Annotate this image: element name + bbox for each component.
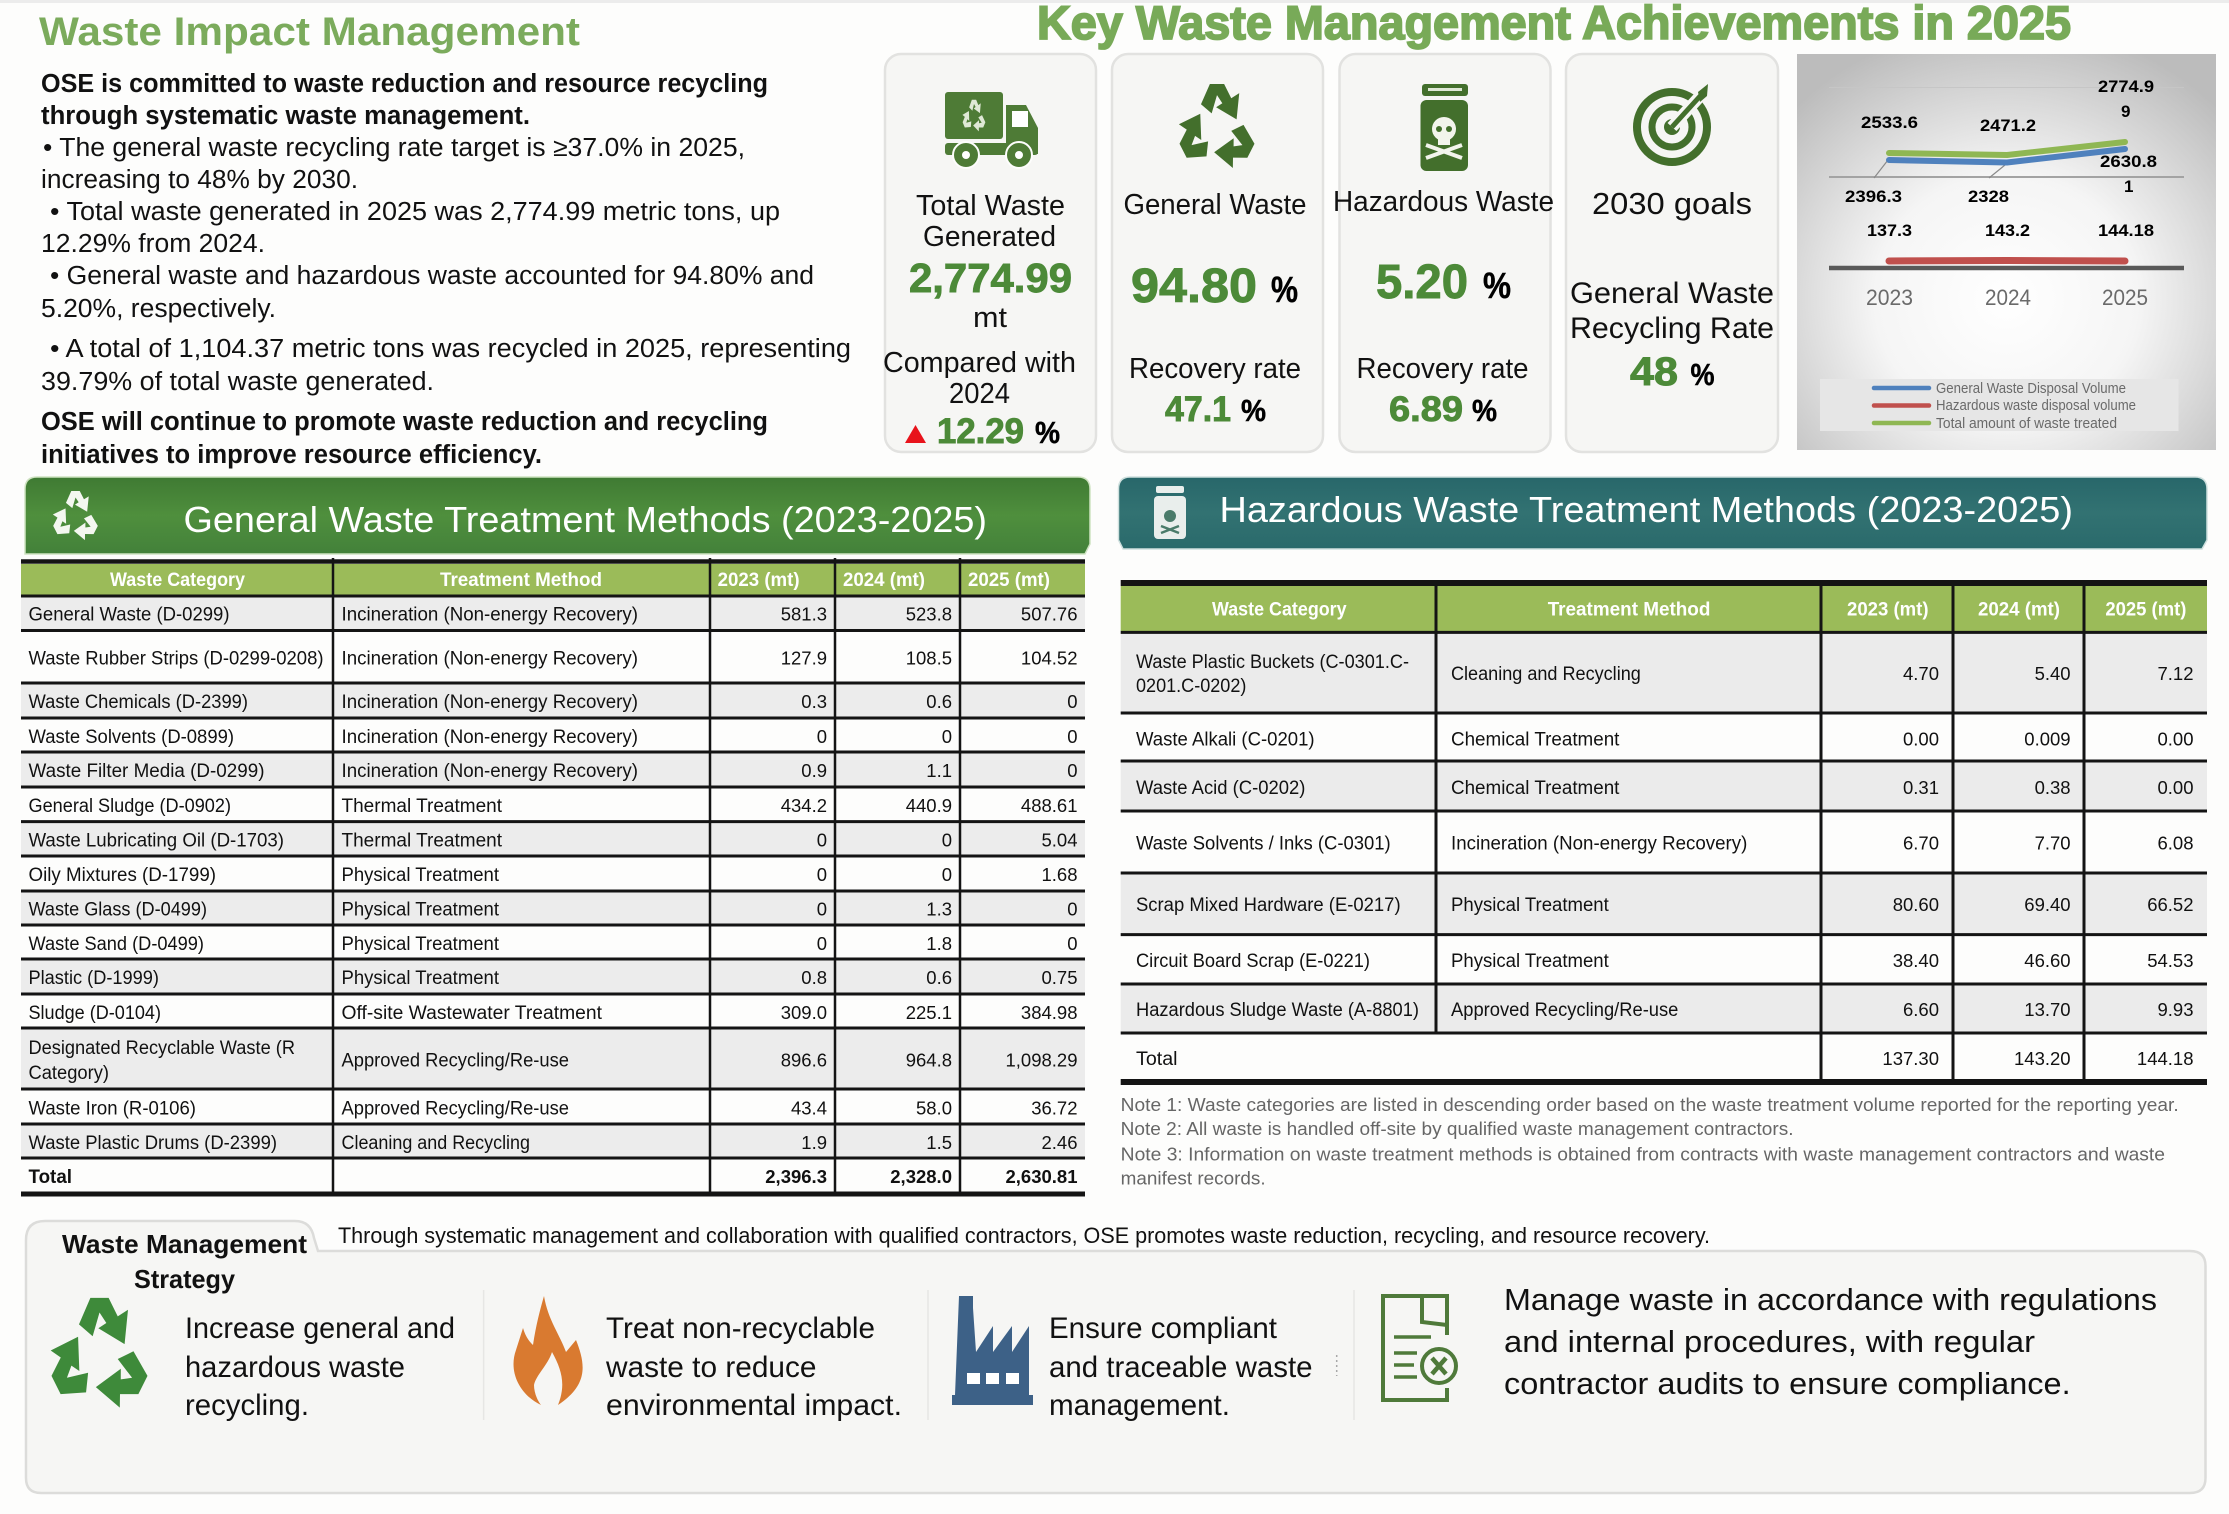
text block: waste commitment summary: through systematic waste management. [41,102,530,130]
row: Designated Recyclable Waste: 964.8 [906,1050,952,1070]
banner: general waste treatment methods [25,477,1090,554]
row: Waste Lubricating Oil: Thermal Treatment [342,830,503,852]
row: Designated Recyclable Waste: Approved Recycling/Re-use [342,1050,569,1072]
row: Waste Sand: Physical Treatment [342,934,500,955]
value: 6.89 percent [1389,390,1497,429]
row: General Waste: 507.76 [1021,604,1078,624]
icon: red up triangle [905,425,926,443]
row: Total: Total [28,1167,72,1188]
row: Hazardous Sludge Waste: Approved Recycling/Re-use [1451,1000,1678,1021]
value: 47.1 percent: 47.1 [1165,390,1231,429]
text block: table notes: manifest records. [1121,1168,1266,1188]
value: 5.20 percent: % [1483,265,1511,306]
icon: document with x mark [1383,1296,1456,1400]
data labels: 143.2 [1985,221,2030,240]
icon: white hazard bottle [1154,486,1186,539]
row: Waste Plastic Drums: 1.5 [926,1132,952,1153]
text block: waste commitment summary: initiatives to improve resource efficiency. [41,441,542,469]
table header: Waste Category [1212,600,1347,620]
row: Waste Sand: Waste Sand (D-0499) [28,934,204,955]
row: Waste Solvents / Inks [1136,832,2194,854]
value: 94.80 percent: % [1271,269,1298,310]
label: compared with 2024: 2024 [949,378,1010,410]
text block: waste commitment summary: increasing to 48% by 2030. [41,166,358,194]
data labels: 2328 [1968,187,2009,206]
row: General Waste [28,604,1078,626]
row: General Waste: 581.3 [781,604,827,624]
data labels: 137.3 [1867,221,1912,240]
text block: table notes: Note 3: Information on waste treatment methods is obtained from contracts with waste management contractors and waste [1121,1144,2165,1164]
row: Scrap Mixed Hardware: Physical Treatment [1451,895,1609,916]
row: Waste Rubber Strips: 108.5 [906,648,952,668]
row: Hazardous Sludge Waste: 9.93 [2157,999,2194,1020]
banner title: General Waste Treatment Methods (2023-2025) [184,499,987,540]
row: Oily Mixtures: 0 [942,864,952,885]
label: recovery rate: Recovery rate [1129,353,1301,385]
row: Waste Glass [28,898,1078,920]
heading: waste management strategy [62,1229,307,1294]
row: Oily Mixtures: Oily Mixtures (D-1799) [28,865,216,886]
label: hazardous waste: Hazardous Waste [1333,186,1554,218]
row: Total: Total [1136,1049,1178,1070]
row: Waste Iron: 43.4 [791,1098,827,1118]
row: General Sludge: 488.61 [1021,795,1078,816]
text: treat non-recyclable waste: waste to reduce [605,1351,816,1384]
row: Waste Alkali: Chemical Treatment [1451,730,1620,750]
row: Waste Plastic Buckets: 5.40 [2035,663,2071,684]
row: General Waste: 523.8 [906,604,952,624]
data labels: 2396.3 [1845,187,1902,206]
row: Waste Acid: 0.38 [2035,777,2071,798]
value: 47.1 percent [1165,390,1266,429]
row: Waste Plastic Drums: Cleaning and Recycling [342,1133,530,1154]
heading: waste management strategy: Waste Management [62,1229,307,1259]
label: total waste generated: Generated [923,221,1056,253]
panel: general waste card [1112,54,1323,452]
label: compared with 2024: Compared with [883,347,1076,379]
table header: 2023 (mt) [718,570,800,591]
text: regulations and audits: and internal procedures, with regular [1504,1324,2035,1359]
text: compliant and traceable [1049,1312,1312,1422]
row: General Sludge: General Sludge (D-0902) [28,796,231,817]
label: recovery rate: Recovery rate [1356,353,1528,385]
table header: 2025 (mt) [2105,600,2186,620]
row: Waste Filter Media: 0.9 [801,760,827,781]
row: Sludge: 309.0 [781,1002,827,1023]
row: Waste Plastic Buckets: 7.12 [2157,663,2194,684]
row: Waste Chemicals: Incineration (Non-energy Recovery) [342,692,638,713]
value: 6.89 percent: 6.89 [1389,390,1463,429]
text: regulations and audits: Manage waste in accordance with regulations [1504,1282,2157,1317]
row: Waste Sand: 0 [1067,933,1078,954]
text: increase recycling [185,1312,455,1422]
row: Waste Solvents: Incineration (Non-energy Recovery) [342,727,638,748]
value: 48 percent [1630,350,1714,394]
row: Waste Plastic Buckets: 0201.C-0202) [1136,676,1246,697]
icon: recycling truck [945,92,1038,168]
row: Waste Lubricating Oil: 0 [942,830,952,850]
x axis years: 2024 [1985,285,2031,310]
row: Waste Acid: 0.31 [1903,777,1939,798]
row: Total [1136,1048,2194,1070]
table: general waste treatment methods [21,558,1085,1194]
row: Plastic: Physical Treatment [342,968,500,989]
row: Circuit Board Scrap: 38.40 [1893,950,1939,971]
row: Waste Lubricating Oil: 5.04 [1041,830,1078,850]
value: 47.1 percent: % [1241,393,1266,428]
icon: white recycle symbol [49,491,100,543]
label: general waste recycling rate [1570,277,1774,345]
text: compliant and traceable: and traceable waste [1049,1351,1312,1384]
label: general waste: General Waste [1124,189,1306,221]
row: Total [28,1166,1078,1188]
value: 12.29 percent: % [1035,415,1060,450]
text block: waste commitment summary [41,70,851,469]
panel: hazardous waste card [1333,54,1554,452]
text: compliant and traceable: Ensure compliant [1049,1312,1278,1345]
row: Designated Recyclable Waste: Designated Recyclable Waste (R [28,1038,295,1059]
text block: table notes [1121,1095,2179,1188]
row: Waste Plastic Drums: Waste Plastic Drums (D-2399) [28,1133,277,1154]
data labels: 9 [2121,102,2130,121]
chart legend: Hazardous waste disposal volume [1936,398,2136,414]
row: Waste Lubricating Oil [28,830,1078,852]
value: 5.20 percent [1376,256,1511,309]
panel: 2030 goals card [1566,54,1778,452]
row: Hazardous Sludge Waste: Hazardous Sludge Waste (A-8801) [1136,1000,1419,1021]
row: Waste Glass: 0 [817,898,827,920]
table header [110,570,1050,591]
value: 6.89 percent: % [1472,393,1497,428]
row: Waste Glass: 1.3 [926,898,952,920]
row: Waste Plastic Buckets [1136,652,2194,697]
row: Plastic: 0.8 [801,967,827,988]
row: Waste Alkali: Waste Alkali (C-0201) [1136,730,1315,750]
row: Hazardous Sludge Waste [1136,999,2194,1021]
row: Sludge: 384.98 [1021,1002,1078,1023]
row: Waste Rubber Strips: 104.52 [1021,648,1078,668]
value: 48 percent: % [1690,357,1714,392]
panel: total waste generated card [883,54,1096,452]
text: strategy summary sentence: Through systematic management and collaboration with qualified contractors, OSE promotes waste reduction, recycling, and resource recovery. [338,1223,1710,1248]
table header: Waste Category [110,570,245,591]
series: hazardous waste disposal volume [1889,257,2125,264]
row: Sludge: Sludge (D-0104) [28,1003,161,1024]
row: General Waste: General Waste (D-0299) [28,604,230,626]
value: 94.80 percent: 94.80 [1131,260,1257,313]
row: Waste Chemicals: 0.6 [926,691,952,712]
text block: table notes: Note 1: Waste categories are listed in descending order based on the waste treatment volume reported for the reporting year. [1121,1095,2179,1115]
table header: Treatment Method [440,570,602,591]
row: Total: 137.30 [1882,1048,1939,1069]
row: Waste Alkali: 0.00 [1903,728,1939,750]
text block: waste commitment summary: • Total waste generated in 2025 was 2,774.99 metric tons, up [50,198,780,226]
text block: waste commitment summary: • The general waste recycling rate target is ≥37.0% in 2025, [43,134,745,162]
row: Total: 2,396.3 [765,1166,827,1187]
row: Waste Plastic Drums [28,1132,1078,1154]
value: 5.20 percent: 5.20 [1376,256,1468,309]
text block: table notes: Note 2: All waste is handled off-site by qualified waste management contractors. [1121,1119,1794,1139]
title: Waste Impact Management: Waste Impact Management [39,10,580,54]
row: Oily Mixtures [28,864,1078,886]
label: total waste generated [916,190,1065,253]
row: Waste Acid [1136,777,2194,799]
row: Oily Mixtures: 0 [817,864,827,885]
row: Total: 2,328.0 [890,1166,952,1187]
text: regulations and audits [1504,1282,2157,1401]
table: hazardous waste treatment methods [1121,580,2207,1085]
chart legend: Total amount of waste treated [1936,416,2117,432]
data labels: 1 [2124,177,2133,196]
table header: 2025 (mt) [968,570,1050,591]
row: Waste Filter Media: 0 [1067,760,1078,781]
data labels: 2471.2 [1980,116,2036,135]
banner: hazardous waste treatment methods [1118,477,2207,549]
row: Waste Solvents / Inks: 6.08 [2157,832,2194,854]
row: Waste Alkali: 0.009 [2024,728,2071,750]
table header [1212,600,2186,620]
text block: waste commitment summary: OSE will continue to promote waste reduction and recycling [41,408,768,436]
row: Waste Filter Media: Incineration (Non-energy Recovery) [342,761,638,782]
value: 48 percent: 48 [1630,350,1678,394]
label: compared with 2024 [883,347,1076,410]
row: Plastic: 0.6 [926,967,952,988]
row: Waste Alkali [1136,728,2194,750]
text: increase recycling: recycling. [185,1389,309,1422]
row: Scrap Mixed Hardware: 66.52 [2147,894,2194,915]
row: Waste Solvents / Inks: Waste Solvents / Inks (C-0301) [1136,834,1391,854]
row: Waste Solvents [28,726,1078,748]
row: Sludge: 225.1 [906,1002,952,1023]
row: Waste Plastic Buckets: Waste Plastic Buckets (C-0301.C- [1136,652,1409,673]
row: Designated Recyclable Waste: Category) [28,1063,109,1084]
row: Waste Iron: Waste Iron (R-0106) [28,1098,196,1120]
row: Waste Rubber Strips: 127.9 [781,648,827,668]
text: increase recycling: Increase general and [185,1312,455,1345]
row: Waste Acid: Waste Acid (C-0202) [1136,778,1305,799]
row: Circuit Board Scrap: Circuit Board Scrap (E-0221) [1136,951,1370,972]
row: Designated Recyclable Waste: 1,098.29 [1005,1050,1078,1070]
row: Waste Sand [28,933,1078,955]
row: Waste Lubricating Oil: 0 [817,830,827,850]
row: Waste Plastic Buckets: 4.70 [1903,663,1939,684]
text block: waste commitment summary: OSE is committed to waste reduction and resource recycling [41,70,768,98]
row: Circuit Board Scrap [1136,950,2194,972]
row: Circuit Board Scrap: 54.53 [2147,950,2194,971]
row: Waste Acid: Chemical Treatment [1451,778,1620,799]
row: Waste Filter Media: Waste Filter Media (D-0299) [28,761,264,782]
table header: Treatment Method [1548,600,1710,620]
row: General Sludge: 434.2 [781,795,827,816]
row: Plastic [28,967,1078,989]
row: Waste Filter Media: 1.1 [926,760,952,781]
row: Waste Glass: Waste Glass (D-0499) [28,900,207,920]
row: Waste Solvents: Waste Solvents (D-0899) [28,727,234,748]
row: General Sludge: 440.9 [906,795,952,816]
text block: waste commitment summary: • General waste and hazardous waste accounted for 94.80% and [50,262,814,290]
row: Waste Acid: 0.00 [2157,777,2194,798]
series: total amount of waste treated [1889,142,2125,155]
row: Scrap Mixed Hardware: 80.60 [1893,894,1939,915]
label: total waste generated: Total Waste [916,190,1065,222]
row: Waste Iron: 58.0 [916,1098,952,1118]
row: Waste Glass: Physical Treatment [342,900,500,920]
row: Designated Recyclable Waste [28,1038,1078,1084]
label: general waste recycling rate: Recycling Rate [1570,312,1774,345]
row: Designated Recyclable Waste: 896.6 [781,1050,827,1070]
icon: hazard bottle [1420,84,1468,171]
row: Waste Solvents: 0 [817,726,827,747]
text block: waste commitment summary: • A total of 1,104.37 metric tons was recycled in 2025, representing [50,335,851,363]
row: Waste Chemicals: 0.3 [801,691,827,712]
row: Scrap Mixed Hardware: 69.40 [2024,894,2071,915]
icon: target with arrow [1637,84,1708,162]
row: Waste Solvents / Inks: 6.70 [1903,832,1939,854]
chart legend [1820,379,2178,432]
table header: 2024 (mt) [1978,600,2060,620]
data labels: 2774.9 [2098,77,2154,96]
x axis years [1866,285,2148,310]
x axis years: 2023 [1866,285,1913,310]
row: General Waste: Incineration (Non-energy Recovery) [342,604,638,626]
row: Hazardous Sludge Waste: 13.70 [2024,999,2071,1020]
row: Waste Sand: 1.8 [926,933,952,954]
row: Hazardous Sludge Waste: 6.60 [1903,999,1939,1020]
row: Waste Chemicals: 0 [1067,691,1078,712]
row: Sludge: Off-site Wastewater Treatment [342,1003,603,1024]
banner title: Hazardous Waste Treatment Methods (2023-2025) [1220,489,2073,530]
x axis years: 2025 [2102,285,2148,310]
icon: orange flame [514,1296,583,1405]
row: Waste Solvents: 0 [1067,726,1078,747]
row: Waste Plastic Drums: 2.46 [1041,1132,1078,1153]
row: Waste Plastic Buckets: Cleaning and Recycling [1451,664,1641,685]
row: Waste Solvents / Inks: 7.70 [2035,832,2071,854]
row: General Sludge: Thermal Treatment [342,796,503,817]
row: Circuit Board Scrap: Physical Treatment [1451,951,1609,972]
row: Waste Glass: 0 [1067,898,1078,920]
row: Sludge [28,1002,1078,1024]
data labels: 2630.8 [2100,152,2157,171]
row: Plastic: Plastic (D-1999) [28,968,159,989]
label: general waste recycling rate: General Waste [1570,277,1774,310]
row: Plastic: 0.75 [1041,967,1078,988]
chart legend: General Waste Disposal Volume [1936,381,2126,397]
heading: waste management strategy: Strategy [134,1264,236,1294]
row: Oily Mixtures: Physical Treatment [342,865,500,886]
row: Circuit Board Scrap: 46.60 [2024,950,2071,971]
row: Waste Chemicals: Waste Chemicals (D-2399) [28,692,248,713]
row: Waste Rubber Strips: Incineration (Non-energy Recovery) [342,648,638,670]
row: Total: 144.18 [2137,1048,2194,1069]
row: Waste Plastic Drums: 1.9 [801,1132,827,1153]
unit: mt: mt [973,302,1007,334]
row: Waste Filter Media [28,760,1078,782]
table header: 2023 (mt) [1847,600,1928,620]
text block: waste commitment summary: 5.20%, respectively. [41,295,276,323]
row: Waste Iron [28,1098,1078,1120]
row: Waste Iron: Approved Recycling/Re-use [342,1098,569,1120]
row: Waste Chemicals [28,691,1078,713]
series: general waste disposal volume [1889,149,2125,162]
row: Total: 2,630.81 [1005,1166,1078,1187]
text: treat non-recyclable waste [605,1312,902,1422]
row: Waste Sand: 0 [817,933,827,954]
row: Scrap Mixed Hardware: Scrap Mixed Hardware (E-0217) [1136,895,1401,916]
row: Scrap Mixed Hardware [1136,894,2194,916]
row: Waste Solvents / Inks: Incineration (Non-energy Recovery) [1451,834,1747,854]
text: regulations and audits: contractor audits to ensure compliance. [1504,1366,2071,1401]
label: 2030 goals: 2030 goals [1592,186,1752,221]
icon: recycle symbol [1172,84,1259,173]
text: treat non-recyclable waste: environmental impact. [606,1389,902,1422]
line chart: waste volume trend 2023-2025 [1797,54,2216,450]
data labels [1845,77,2157,240]
icon: blue factory [952,1296,1033,1405]
table header: 2024 (mt) [843,570,925,591]
row: Waste Solvents: 0 [942,726,952,747]
row: Oily Mixtures: 1.68 [1041,864,1078,885]
panel: waste management strategy [26,1221,2206,1493]
row: Waste Rubber Strips [28,648,1078,670]
text: treat non-recyclable waste: Treat non-recyclable [606,1312,875,1345]
text: increase recycling: hazardous waste [185,1351,405,1384]
text: compliant and traceable: management. [1049,1389,1230,1422]
row: General Sludge [28,795,1078,817]
icon: green recycle symbol [42,1298,153,1414]
row: Total: 143.20 [2014,1048,2071,1069]
row: Waste Rubber Strips: Waste Rubber Strips (D-0299-0208) [28,648,324,670]
data labels: 144.18 [2098,221,2154,240]
value: 2,774.99: 2,774.99 [909,255,1072,301]
text block: waste commitment summary: 39.79% of total waste generated. [41,368,434,396]
row: Waste Iron: 36.72 [1031,1098,1078,1118]
value: 12.29 percent: 12.29 [937,412,1024,451]
row: Waste Alkali: 0.00 [2157,728,2194,750]
text block: waste commitment summary: 12.29% from 2024. [41,230,265,258]
row: Waste Lubricating Oil: Waste Lubricating Oil (D-1703) [28,830,284,852]
data labels: 2533.6 [1861,113,1918,132]
